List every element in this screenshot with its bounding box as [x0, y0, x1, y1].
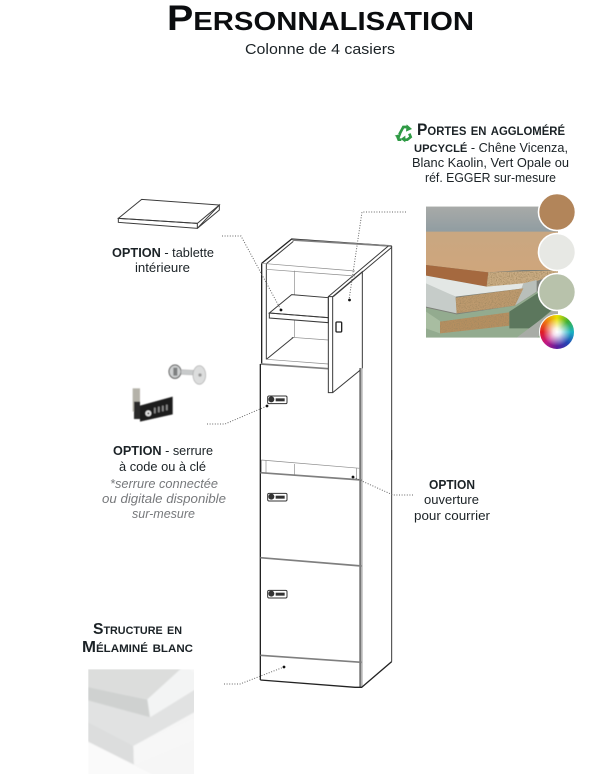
photo: chipboard door panels: [426, 207, 558, 338]
heading: white melamine structure: Structure en: [93, 621, 182, 638]
illustration: optional loose shelf: [118, 199, 219, 228]
leader: mail opening: [352, 476, 413, 495]
inner shelf: [269, 295, 328, 318]
heading: white melamine structure: Mélaminé blanc: [82, 639, 193, 656]
lock plate: first door: [268, 396, 287, 404]
text block: optional lock: ou digitale disponible: [102, 492, 226, 506]
text block: optional lock: *serrure connectée: [110, 477, 218, 491]
icon: combination lock: [133, 388, 173, 422]
open top locker: [261, 239, 392, 460]
swatch: custom colour wheel: [539, 314, 575, 350]
text block: optional lock: sur-mesure: [132, 507, 195, 521]
text block: optional mail opening: ouverture: [424, 493, 479, 507]
door handle: [336, 322, 342, 332]
leader: inner shelf: [222, 236, 282, 311]
leader: melamine structure: [224, 666, 285, 684]
photo: white melamine boards: [88, 669, 194, 774]
heading: white melamine structure: [82, 621, 193, 656]
text block: doors in upcycled chipboard: upcyclé - Chêne Vicenza,: [414, 139, 568, 156]
text block: doors in upcycled chipboard: Blanc Kaolin, Vert Opale ou: [412, 156, 569, 170]
lock plate: third door: [268, 590, 287, 598]
leader: lock: [207, 405, 268, 424]
text block: optional inner shelf: intérieure: [135, 261, 190, 275]
text block: optional mail opening: OPTION: [429, 478, 475, 492]
icon: recycling symbol: [395, 124, 412, 142]
swatch: Blanc Kaolin: [538, 234, 576, 270]
text block: optional lock: OPTION - serrure: [113, 444, 213, 458]
leader: door panel: [348, 212, 406, 301]
text block: optional lock: [102, 444, 226, 521]
infographic page: [83, 6, 575, 774]
text block: optional inner shelf: OPTION - tablette: [112, 246, 214, 260]
swatch: Chêne Vicenza: [538, 194, 576, 230]
icon: key: [169, 365, 206, 384]
text block: doors in upcycled chipboard: [412, 121, 569, 185]
text block: optional inner shelf: [112, 246, 214, 275]
open door: [328, 297, 333, 393]
text block: optional mail opening: pour courrier: [414, 509, 490, 523]
text block: optional lock: à code ou à clé: [119, 460, 206, 474]
closed lockers: [260, 364, 392, 687]
subtitle: Colonne de 4 casiers: [245, 41, 395, 58]
text block: optional mail opening: [414, 478, 490, 523]
illustration: locker column: [260, 239, 392, 687]
text block: doors in upcycled chipboard: Portes en aggloméré: [417, 121, 565, 139]
swatch: Vert Opale: [538, 274, 576, 310]
text block: doors in upcycled chipboard: réf. EGGER sur-mesure: [425, 171, 556, 185]
lock plate: second door: [268, 493, 287, 501]
